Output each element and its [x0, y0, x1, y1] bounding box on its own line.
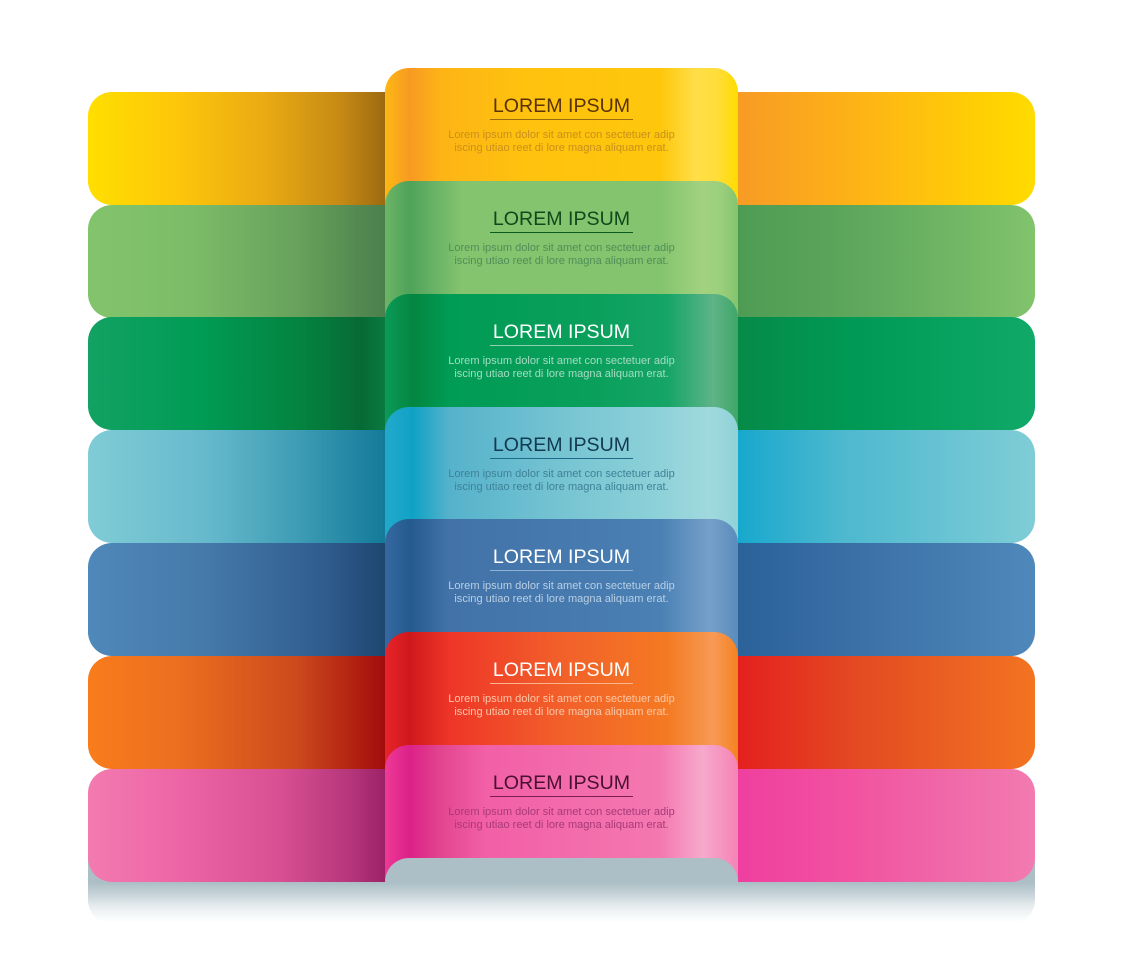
heading: LOREM IPSUM [493, 95, 630, 117]
band: blue right [738, 543, 1035, 656]
body text [448, 129, 675, 154]
body text: iscing utiao reet di lore magna aliquam erat. [454, 819, 669, 831]
body text: Lorem ipsum dolor sit amet con sectetuer adip [448, 580, 675, 592]
body text: Lorem ipsum dolor sit amet con sectetuer adip [448, 355, 675, 367]
bottom tab [385, 858, 738, 883]
band: orange right [738, 656, 1035, 769]
body text: iscing utiao reet di lore magna aliquam erat. [454, 706, 669, 718]
underline [490, 796, 633, 797]
body text: iscing utiao reet di lore magna aliquam erat. [454, 255, 669, 267]
body text: iscing utiao reet di lore magna aliquam erat. [454, 481, 669, 493]
band: green left [88, 317, 385, 430]
band: pink right [738, 769, 1035, 882]
panel: blue [385, 519, 738, 656]
body text [448, 580, 675, 605]
body text [448, 242, 675, 267]
underline [490, 345, 633, 346]
band: yellow right [738, 92, 1035, 205]
band: blue left [88, 543, 385, 656]
body text: Lorem ipsum dolor sit amet con sectetuer adip [448, 468, 675, 480]
band: light blue left [88, 430, 385, 543]
body text: iscing utiao reet di lore magna aliquam erat. [454, 368, 669, 380]
heading: LOREM IPSUM [493, 208, 630, 230]
underline [490, 683, 633, 684]
bottom shadow [88, 850, 1035, 924]
band: light blue right [738, 430, 1035, 543]
panel: orange red [385, 632, 738, 769]
band: light green right [738, 205, 1035, 318]
body text [448, 693, 675, 718]
body text: iscing utiao reet di lore magna aliquam erat. [454, 593, 669, 605]
heading: LOREM IPSUM [493, 772, 630, 794]
body text: Lorem ipsum dolor sit amet con sectetuer adip [448, 242, 675, 254]
underline [490, 232, 633, 233]
panel: light blue [385, 407, 738, 544]
heading: LOREM IPSUM [493, 546, 630, 568]
body text: Lorem ipsum dolor sit amet con sectetuer adip [448, 129, 675, 141]
underline [490, 570, 633, 571]
panel: green [385, 294, 738, 431]
body text: Lorem ipsum dolor sit amet con sectetuer adip [448, 806, 675, 818]
underline [490, 119, 633, 120]
underline [490, 458, 633, 459]
heading: LOREM IPSUM [493, 659, 630, 681]
body text: Lorem ipsum dolor sit amet con sectetuer adip [448, 693, 675, 705]
body text [448, 468, 675, 493]
panel: pink [385, 745, 738, 882]
band: yellow left [88, 92, 385, 205]
body text [448, 355, 675, 380]
heading: LOREM IPSUM [493, 321, 630, 343]
band: green right [738, 317, 1035, 430]
body text: iscing utiao reet di lore magna aliquam erat. [454, 142, 669, 154]
body text [448, 806, 675, 831]
band: orange left [88, 656, 385, 769]
panel: light green [385, 181, 738, 318]
heading: LOREM IPSUM [493, 434, 630, 456]
band: light green left [88, 205, 385, 318]
band: pink left [88, 769, 385, 882]
panel: yellow [385, 68, 738, 205]
